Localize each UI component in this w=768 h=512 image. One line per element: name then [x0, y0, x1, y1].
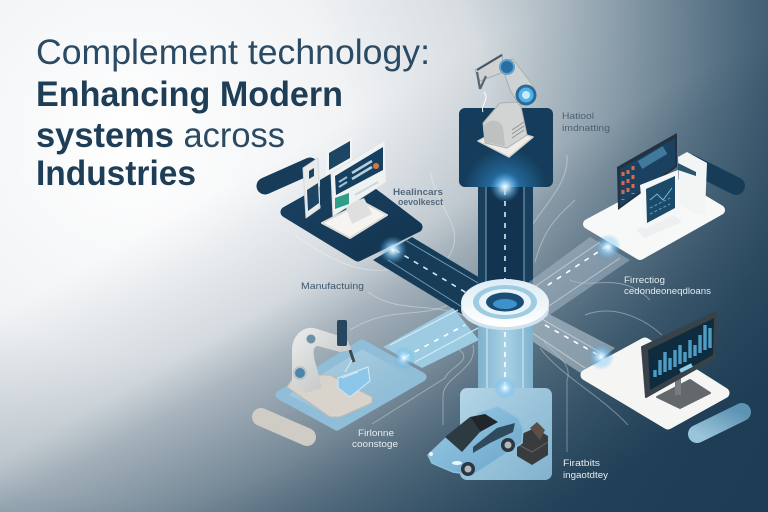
icon: industrial robot arm [287, 320, 372, 417]
label: firlonne: Firlonne [358, 428, 394, 438]
icon: tower [678, 152, 707, 215]
icon: base [322, 202, 387, 238]
platform: car [460, 388, 552, 480]
label: firatbits: ingaotdtey [563, 470, 609, 480]
title: systems across [36, 116, 285, 155]
connector wires [295, 155, 662, 452]
column: bottom [478, 315, 533, 395]
label: healthcare: Healincars [393, 187, 443, 197]
label: healthcare: oevolkesct [398, 197, 443, 207]
label: firlonne [352, 428, 398, 449]
icon: phone device [303, 158, 332, 218]
central hub [461, 279, 549, 330]
panel: analytics platform [586, 312, 742, 434]
road: lower left [383, 308, 479, 368]
icon: monitor stand [657, 372, 710, 408]
title: Enhancing Modern [36, 75, 343, 114]
label: hatiool: imdnatting [562, 123, 610, 133]
icon: car [428, 407, 523, 476]
panel: manufacturing platform [261, 320, 422, 437]
icon: small monitor [636, 170, 682, 238]
title: Complement technology: [36, 33, 430, 72]
label: finance: Firrectiog [624, 275, 665, 285]
decorative pill: blue [697, 412, 742, 434]
label: healthcare [393, 187, 443, 207]
icon: large dashboard screen [617, 133, 677, 210]
road: analytics [515, 312, 615, 374]
platform: lower left [280, 344, 422, 426]
platform: healthcare [286, 176, 417, 256]
node glows [379, 172, 621, 399]
label: firlonne: coonstoge [352, 439, 398, 449]
panel: top platform [459, 54, 553, 187]
label: firatbits [563, 458, 609, 480]
panel: healthcare platform [265, 137, 417, 256]
decorative pill: grey [261, 417, 307, 437]
platform: finance [588, 180, 720, 255]
decorative pill: navy [265, 166, 310, 186]
panel: automotive platform [428, 388, 552, 480]
road: top column [478, 180, 533, 297]
title: Industries [36, 154, 196, 193]
decorative pill: navy [690, 163, 736, 186]
chart: monitor bars [642, 312, 716, 397]
panel: finance platform [588, 133, 736, 255]
platform: robot [459, 108, 553, 187]
label: firatbits: Firatbits [563, 458, 601, 468]
road: finance [510, 237, 630, 318]
icon: back tablet [326, 137, 352, 176]
road: healthcare [373, 237, 500, 322]
icon: main monitor [331, 140, 386, 216]
title [36, 33, 430, 193]
label: hatiool [562, 111, 610, 133]
icon: robot arm [475, 54, 535, 157]
platform: analytics [586, 343, 724, 424]
label: finance: cedondeoneqdloans [624, 286, 712, 296]
label: finance [624, 275, 712, 296]
icon: glass cube [338, 360, 370, 397]
icon: cargo boxes [517, 422, 548, 465]
label: hatiool: Hatiool [562, 111, 594, 121]
label: manufacturing: Manufactuing [301, 281, 364, 292]
